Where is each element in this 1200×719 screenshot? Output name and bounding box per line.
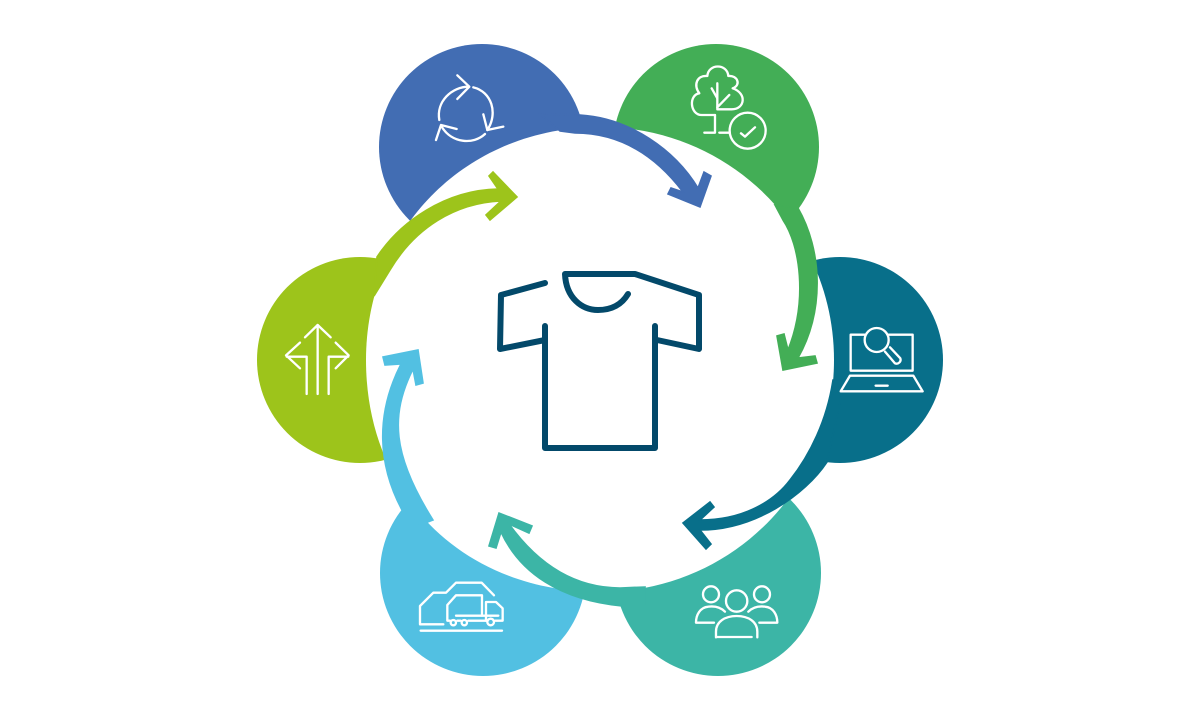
panel: digital research petal [737,257,943,463]
icon: tree with check mark [692,66,766,149]
arrow: dark teal [683,380,845,549]
panel: sustainable sourcing petal [613,44,819,250]
icon: group of people [696,586,777,637]
icon: recycling arrows [436,75,503,141]
panel: waste collection petal [380,470,586,676]
icon: laptop with magnifier [841,328,923,391]
arrow: sea green [489,513,645,606]
arrow: light blue [383,350,433,525]
panel: future directions petal [257,257,463,463]
panel: recycling petal [379,44,585,250]
panel: central white area [366,127,834,592]
icon: t-shirt [500,274,699,448]
arrow: green [775,205,817,370]
icon: collection truck [420,583,503,631]
panel: community petal [615,470,821,676]
arrow: blue [540,114,711,207]
icon: diverging arrows [286,325,349,394]
arrow: lime [374,172,517,296]
